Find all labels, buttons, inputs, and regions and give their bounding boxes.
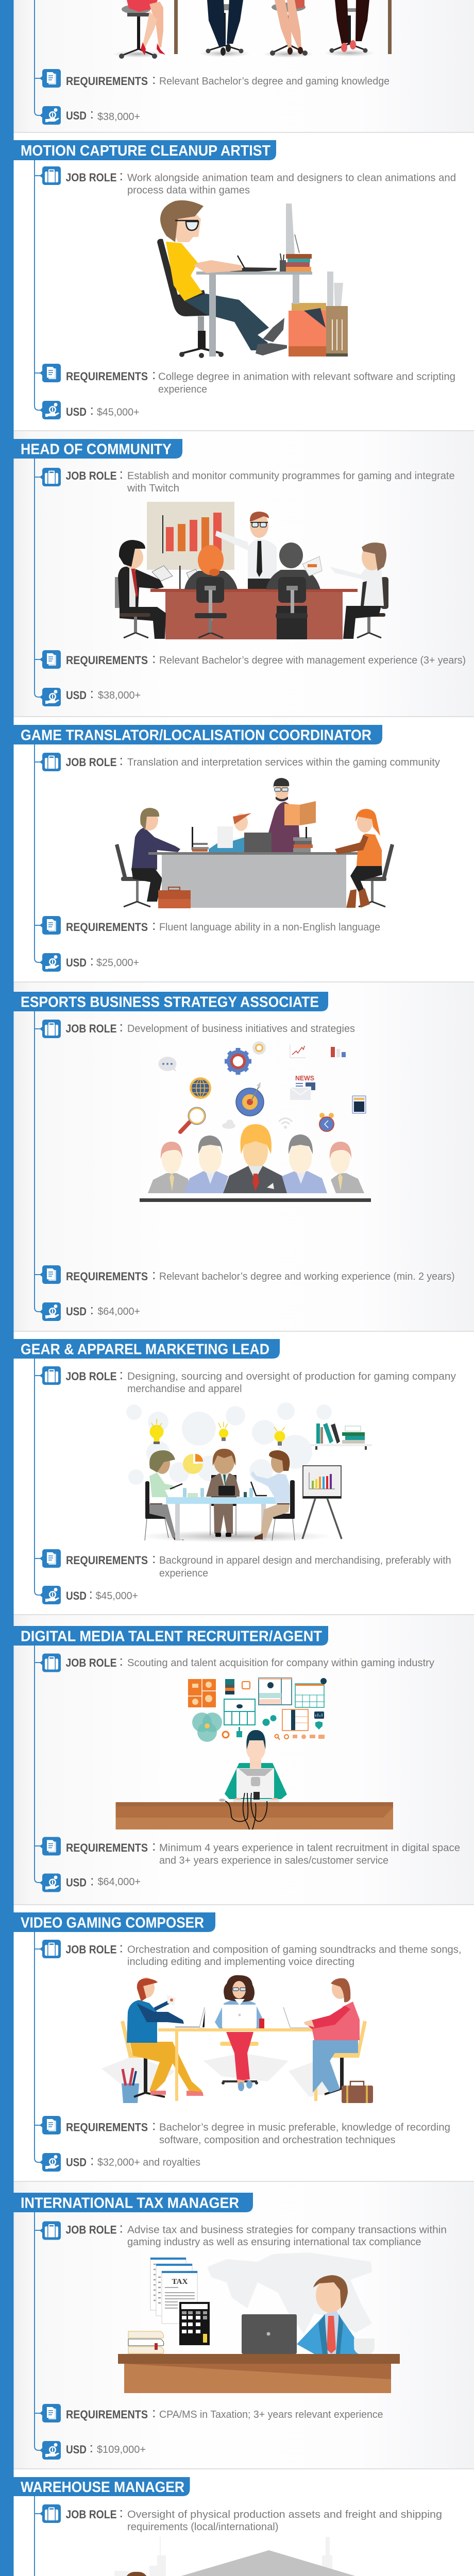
salary: $25,000+ (96, 957, 139, 969)
requirements (40, 1549, 451, 1579)
requirements: REQUIREMENTS (66, 921, 148, 934)
job role (40, 2221, 447, 2248)
requirements: REQUIREMENTS (66, 370, 148, 383)
salary: $45,000+ (97, 406, 139, 418)
illustration: team meeting with ideas (126, 1402, 372, 1543)
panel: Video Gaming Composer (13, 1905, 474, 2182)
heading: GEAR & APPAREL MARKETING LEAD (21, 1342, 269, 1358)
job role: with Twitch (127, 482, 179, 494)
illustration: business team with icons: NEWS (295, 1074, 314, 1082)
illustration: translators at table (115, 778, 394, 908)
salary: : (90, 1302, 94, 1317)
illustration: boardroom presentation (115, 502, 388, 639)
salary (40, 1302, 140, 1321)
job role: gaming industry as well as ensuring international tax compliance (127, 2236, 421, 2248)
requirements: Bachelor’s degree in music preferable, knowledge of recording (159, 2122, 450, 2133)
heading: MOTION CAPTURE CLEANUP ARTIST (21, 143, 270, 159)
job role: : (120, 753, 123, 768)
job role: : (120, 1367, 123, 1382)
requirements (40, 650, 466, 669)
requirements: Fluent language ability in a non-English language (159, 921, 380, 933)
job role: : (120, 2221, 123, 2236)
requirements: : (152, 72, 156, 87)
requirements: REQUIREMENTS (66, 654, 148, 667)
job role: Orchestration and composition of gaming soundtracks and theme songs, (127, 1943, 462, 1956)
job role: JOB ROLE (66, 1370, 116, 1383)
job role: JOB ROLE (66, 1022, 116, 1035)
job role: process data within games (127, 184, 250, 196)
job role: Development of business initiatives and strategies (127, 1023, 355, 1035)
job role: JOB ROLE (66, 171, 116, 184)
job role: JOB ROLE (66, 1943, 116, 1956)
salary (40, 953, 139, 972)
requirements: and 3+ years experience in sales/customer service (159, 1855, 388, 1866)
job role: requirements (local/international) (127, 2521, 278, 2533)
requirements (40, 69, 390, 88)
salary: USD (66, 689, 87, 702)
salary: USD (66, 1876, 87, 1889)
panel: Esports Business Strategy Associate (13, 982, 474, 1332)
requirements (40, 916, 380, 935)
salary: $64,000+ (98, 1876, 141, 1888)
requirements: : (152, 651, 156, 666)
salary: USD (66, 2156, 87, 2169)
requirements (40, 1837, 460, 1866)
salary (40, 401, 139, 419)
job role: : (120, 2505, 123, 2520)
requirements (40, 2116, 450, 2146)
salary (40, 106, 140, 125)
requirements: Relevant Bachelor’s degree and gaming knowledge (159, 75, 390, 87)
salary: $38,000+ (98, 689, 141, 701)
heading: HEAD OF COMMUNITY (21, 441, 172, 457)
requirements: : (152, 1267, 156, 1282)
salary: USD (66, 1589, 87, 1602)
salary: : (90, 686, 94, 701)
panel: Head of Community (13, 431, 474, 717)
job role: : (120, 1019, 123, 1035)
requirements: REQUIREMENTS (66, 75, 148, 88)
job role (40, 1653, 435, 1672)
illustration: tax manager at desk (118, 2252, 400, 2393)
job role: : (120, 466, 123, 482)
requirements: REQUIREMENTS (66, 2121, 148, 2134)
requirements: Relevant Bachelor’s degree with management experience (3+ years) (159, 654, 466, 666)
panel: top section (13, 0, 474, 133)
panel: Game Translator/Localisation Coordinator (13, 717, 474, 982)
salary: : (90, 953, 94, 969)
salary (40, 2440, 146, 2460)
job role (40, 166, 456, 196)
salary: : (90, 2153, 94, 2168)
requirements: : (152, 1551, 156, 1566)
salary: : (90, 2440, 93, 2455)
requirements: REQUIREMENTS (66, 2408, 148, 2421)
requirements (40, 2404, 383, 2422)
salary: USD (66, 2443, 87, 2456)
job role: JOB ROLE (66, 2508, 116, 2521)
job role: : (120, 1653, 123, 1669)
salary (40, 686, 141, 706)
job role (40, 2504, 442, 2533)
illustration: seated team legs (112, 0, 392, 59)
salary: USD (66, 956, 87, 969)
requirements: College degree in animation with relevant software and scripting (158, 371, 455, 382)
job role: Establish and monitor community programmes for gaming and integrate (127, 470, 455, 482)
requirements: : (152, 2405, 156, 2420)
job role: Translation and interpretation services within the gaming community (127, 756, 441, 768)
panel: Motion Capture Cleanup Artist (13, 133, 474, 431)
requirements (40, 364, 455, 395)
salary: $109,000+ (97, 2444, 146, 2455)
salary: USD (66, 405, 87, 418)
heading: INTERNATIONAL TAX MANAGER (21, 2195, 239, 2211)
salary: : (90, 106, 94, 122)
heading: DIGITAL MEDIA TALENT RECRUITER/AGENT (21, 1628, 322, 1645)
requirements: software, composition and orchestration techniques (159, 2134, 396, 2146)
salary: USD (66, 1305, 87, 1318)
requirements (40, 1265, 455, 1284)
job role: JOB ROLE (66, 469, 116, 482)
panel: International Tax Manager (13, 2182, 474, 2469)
requirements: experience (158, 383, 207, 395)
job role: JOB ROLE (66, 1656, 116, 1669)
requirements: : (152, 918, 156, 933)
illustration: tax manager at desk: TAX (172, 2278, 188, 2286)
requirements: CPA/MS in Taxation; 3+ years relevant experience (159, 2409, 383, 2420)
requirements: REQUIREMENTS (66, 1841, 148, 1854)
illustration: composers at laptops (101, 1975, 373, 2103)
job role: JOB ROLE (66, 756, 116, 769)
illustration: business team with icons (140, 1041, 371, 1202)
salary: : (89, 1586, 93, 1602)
job role: Oversight of physical production assets and freight and shipping (127, 2509, 442, 2520)
salary: $38,000+ (97, 111, 140, 123)
salary (40, 1873, 141, 1892)
illustration: recruiter at monitor with UI icons (115, 1678, 393, 1829)
job role: Advise tax and business strategies for company transactions within (127, 2224, 447, 2236)
job role (40, 753, 441, 771)
job role: JOB ROLE (66, 2224, 116, 2236)
salary (40, 2153, 200, 2172)
illustration: artist at desk (157, 200, 348, 358)
salary: $45,000+ (96, 1590, 138, 1602)
salary (40, 1586, 138, 1604)
job role: Work alongside animation team and designers to clean animations and (127, 172, 456, 183)
job role (40, 1366, 456, 1395)
heading: ESPORTS BUSINESS STRATEGY ASSOCIATE (21, 994, 319, 1011)
requirements: Minimum 4 years experience in talent recruitment in digital space (159, 1842, 460, 1854)
heading: WAREHOUSE MANAGER (21, 2479, 184, 2496)
salary: $32,000+ and royalties (97, 2157, 200, 2168)
requirements: REQUIREMENTS (66, 1270, 148, 1283)
panel: Digital Media Talent Recruiter/Agent (13, 1615, 474, 1905)
job role: Scouting and talent acquisition for company within gaming industry (127, 1657, 435, 1669)
salary: : (90, 1873, 94, 1889)
illustration: warehouse and manager (100, 2537, 410, 2576)
panel: Warehouse Manager (13, 2469, 474, 2576)
salary: : (90, 402, 94, 418)
salary: $64,000+ (98, 1306, 140, 1317)
job role (40, 1940, 462, 1968)
heading: GAME TRANSLATOR/LOCALISATION COORDINATOR (21, 727, 371, 744)
job role (40, 466, 455, 494)
panel: Gear & Apparel Marketing Lead (13, 1332, 474, 1615)
salary: USD (66, 109, 87, 122)
requirements: experience (159, 1567, 208, 1579)
requirements: : (152, 367, 156, 382)
requirements: Background in apparel design and merchandising, preferably with (159, 1554, 451, 1566)
job role (40, 1019, 355, 1038)
job role: merchandise and apparel (127, 1383, 242, 1395)
job role: including editing and implementing voice directing (127, 1956, 354, 1968)
requirements: REQUIREMENTS (66, 1554, 148, 1567)
job role: Designing, sourcing and oversight of production for gaming company (127, 1370, 456, 1382)
heading: VIDEO GAMING COMPOSER (21, 1914, 204, 1931)
job role: : (120, 168, 123, 183)
requirements: : (152, 2117, 156, 2133)
requirements: : (152, 1838, 156, 1854)
requirements: Relevant bachelor’s degree and working experience (min. 2 years) (159, 1270, 455, 1282)
job role: : (120, 1940, 123, 1956)
